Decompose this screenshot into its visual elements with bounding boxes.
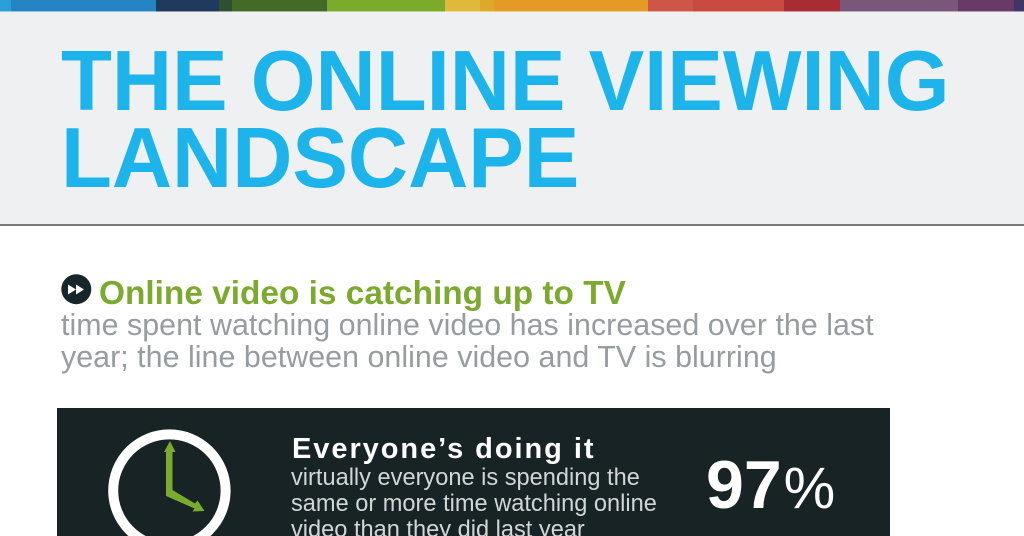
header band (0, 12, 1024, 226)
panel text (291, 465, 657, 536)
panel: everyone's doing it (57, 408, 890, 536)
statistic: 97%: 97% (706, 447, 835, 523)
colour stripe (0, 0, 1024, 12)
panel text: same or more time watching online (291, 491, 657, 517)
title: THE ONLINE VIEWING (60, 34, 949, 128)
title: LANDSCAPE (60, 110, 579, 206)
section description: year; the line between online video and TV is blurring (61, 340, 777, 374)
header rule (0, 224, 1024, 226)
section heading: Online video is catching up to TV (99, 275, 626, 312)
title (60, 34, 949, 206)
icon: fast forward (61, 274, 92, 304)
panel heading: Everyone’s doing it (292, 433, 595, 465)
section description: time spent watching online video has increased over the last (61, 308, 874, 342)
panel text: virtually everyone is spending the (291, 465, 640, 491)
section description (61, 308, 874, 374)
